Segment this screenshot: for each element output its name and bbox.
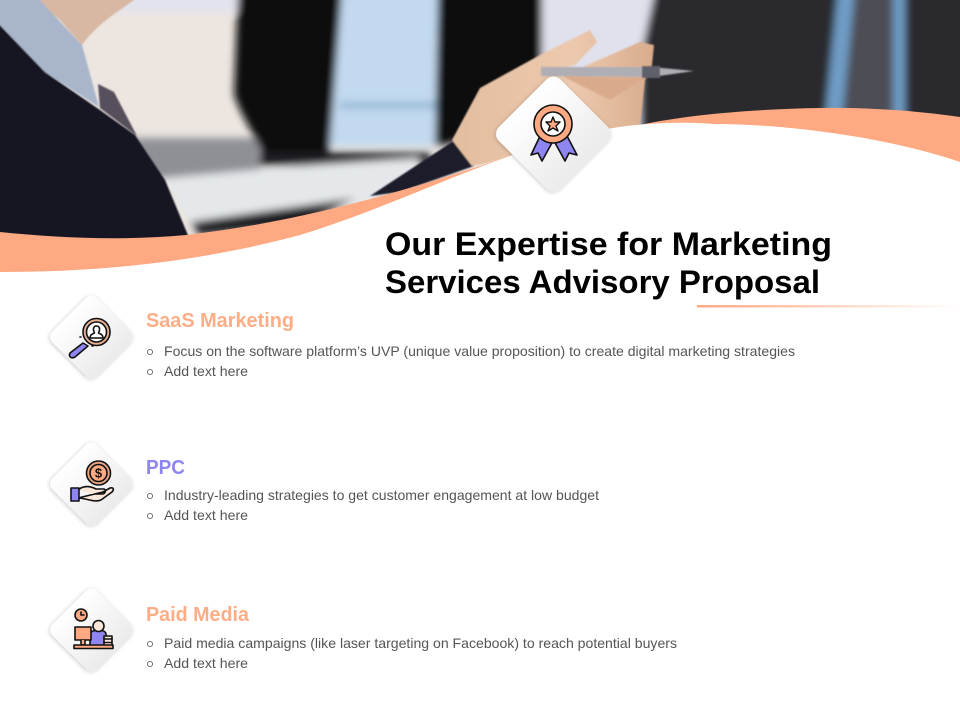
section: SaaS Marketing: [47, 292, 795, 382]
bullet list: Add text here: [164, 656, 248, 671]
bullet list: Industry-leading strategies to get customer engagement at low budget: [164, 488, 599, 503]
section: PPC: [47, 439, 599, 529]
heading: Paid Media: [146, 604, 250, 626]
section: Paid Media: [47, 585, 677, 675]
title: Services Advisory Proposal: [385, 264, 820, 300]
photo: business meeting: [0, 0, 960, 238]
title underline: [697, 305, 960, 308]
icon diamond: person at desk: [47, 585, 136, 675]
icon diamond: magnifier: [47, 292, 136, 382]
heading: SaaS Marketing: [146, 310, 294, 332]
dollar sign: $: [95, 466, 103, 480]
icon: award ribbon: [531, 105, 577, 161]
orange wave band: [0, 108, 960, 300]
bullet list: [147, 488, 599, 523]
icon diamond: hand with coin: [47, 439, 136, 529]
hand with pen: [452, 30, 654, 166]
title: Our Expertise for Marketing: [385, 226, 832, 262]
title: [385, 226, 832, 300]
bullet list: Add text here: [164, 508, 248, 523]
bullet list: [147, 344, 795, 379]
sleeve: [370, 140, 474, 196]
bullet list: Add text here: [164, 364, 248, 379]
left man: neck and collar: [38, 0, 135, 45]
bullet list: [147, 636, 677, 671]
bullet list: Paid media campaigns (like laser targeting on Facebook) to reach potential buyers: [164, 636, 677, 651]
white wave area: [0, 123, 960, 300]
heading: PPC: [146, 457, 185, 479]
bullet list: Focus on the software platform’s UVP (unique value proposition) to create digital marketing strategies: [164, 344, 795, 359]
badge diamond: [492, 72, 615, 196]
